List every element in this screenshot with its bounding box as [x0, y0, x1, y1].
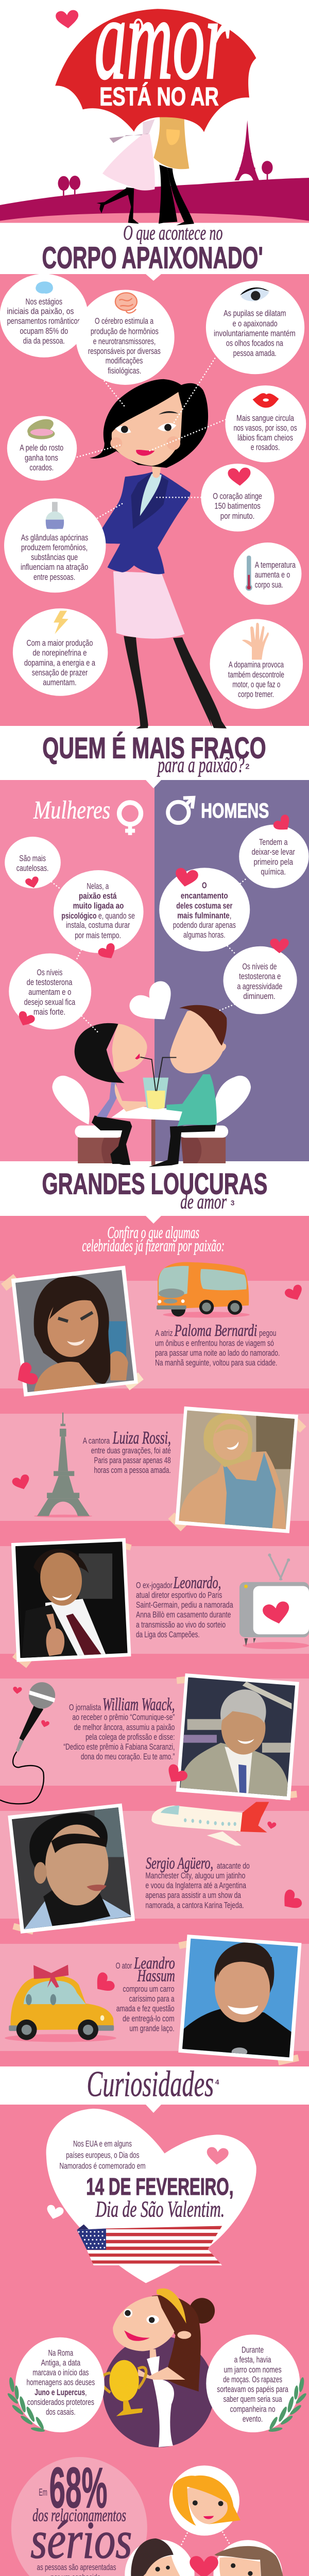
bubble: pupilas: As pupilas se dilatam [224, 309, 286, 318]
icon: heart [228, 467, 251, 486]
photo: Sergio Aguero [8, 1804, 135, 1935]
text: William Waack: ao receber o prêmio “Comunique-se” [72, 1713, 175, 1722]
bubble: psicologico: instala, costuma durar [66, 921, 130, 930]
bubble: glandulas [4, 498, 106, 592]
heading: quem e mais fraco: para a paixão? [157, 753, 244, 777]
text: Luiza Rossi [83, 1428, 171, 1475]
bubble: pupilas [206, 281, 304, 374]
bubble: niveis homem: diminuem. [243, 992, 276, 1001]
illustration: bus [157, 1262, 250, 1318]
heading: curiosidades [87, 2064, 219, 2105]
illustration: tv [239, 1553, 309, 1649]
illustration: car with bow [5, 1965, 116, 2042]
photo: Paloma Bernardi [1, 1266, 144, 1397]
text: Paloma Bernardi: Paloma Bernardi [174, 1321, 257, 1340]
bubble: durante a festa: um jarro com nomes [224, 2365, 282, 2375]
text: Luiza Rossi: A cantora [83, 1436, 110, 1446]
circle: 68 percent: sérios [30, 2511, 132, 2570]
bubble: energia: Com a maior produção [26, 639, 93, 648]
text: Luiza Rossi: entre duas gravações, foi até [91, 1446, 171, 1455]
heading: quem e mais fraco [42, 732, 266, 777]
juno illustration [101, 2289, 215, 2447]
section: loucuras 3 a 5 [0, 1538, 309, 1935]
text: Leonardo: O ex-jogador [136, 1581, 173, 1590]
date text: 14 DE FEVEREIRO, [86, 2173, 233, 2200]
text: Leandro Hassum: Hassum [137, 1967, 175, 1986]
text: William Waack: dona do meu coração. Eu te amo.” [81, 1752, 175, 1761]
text: Paloma Bernardi: pegou [259, 1329, 276, 1338]
icon: compact [25, 416, 56, 439]
bubble: roma antiga: marcava o início das [32, 2368, 89, 2378]
couple under umbrella [96, 116, 194, 225]
heading: corpo apaixonado [42, 221, 263, 275]
heading: quem e mais fraco: 2 [245, 763, 249, 771]
bubble: labios: lábios ficam cheios [237, 433, 293, 443]
bubble: niveis homem: a agressividade [237, 982, 282, 991]
bubble: energia: de norepinefrina e [32, 649, 87, 658]
dotted connectors [77, 359, 226, 518]
bubble: encantamento [159, 867, 250, 952]
bubble: temperatura: corpo sua. [255, 580, 283, 589]
text: Leandro Hassum [116, 1954, 175, 2033]
bubble: cautelosas: cautelosas. [16, 864, 49, 873]
bubble: durante a festa: de moças. Os rapazes [223, 2375, 282, 2384]
text: Leonardo: Saint-Germain, pediu a namorada [136, 1601, 233, 1610]
bubble: roma antiga: Antiga, a data [41, 2358, 81, 2367]
text: William Waack [63, 1695, 175, 1761]
bubble: labios [225, 385, 306, 462]
circle: 68 percent: Em [39, 2487, 47, 2498]
text: Paloma Bernardi [155, 1321, 280, 1368]
text: Leandro Hassum: comprou um carro [123, 1985, 175, 1994]
bubble: quimica: química. [261, 867, 286, 876]
hill with Paris skyline [0, 120, 309, 223]
bubble: niveis mulher: desejo sexual fica [24, 997, 76, 1007]
text: Paloma Bernardi: A atriz [155, 1329, 173, 1338]
bubble: pensamentos: ocupam 85% do [20, 327, 68, 336]
circle: 68 percent: 68% [49, 2456, 108, 2520]
bubble: pensamentos: dia da pessoa. [23, 336, 65, 346]
bubble: encantamento: algumas horas. [183, 930, 226, 940]
heading: curiosidades: Curiosidades [87, 2064, 214, 2105]
bubble: cerebro: e neurotransmissores, [93, 337, 156, 346]
text: Sergio Aguero: Sergio Agüero, [146, 1854, 213, 1873]
bubble: coracao: 150 batimentos [214, 502, 261, 511]
bubble: niveis mulher: mais forte. [33, 1008, 65, 1017]
bubble: cerebro: O cérebro estimula a [95, 317, 154, 326]
icon: eye [240, 287, 269, 301]
bubble: roma antiga: Na Roma [48, 2348, 74, 2358]
text: William Waack: William Waack, [102, 1695, 175, 1715]
bubble: temperatura: aumenta e o [255, 570, 290, 580]
photo: Luiza Rossi [168, 1406, 306, 1533]
text: Leonardo: Anna Billò em casamento durante [136, 1611, 231, 1620]
text: Leandro Hassum: um grande laço. [129, 2024, 175, 2033]
bubble: cerebro [76, 290, 175, 385]
icon: white heart [45, 2204, 64, 2221]
date text: Dia de São Valentim. [95, 2197, 225, 2222]
bubble: durante a festa: a festa, havia [234, 2355, 271, 2365]
bubble: roma antiga: dos casais. [46, 2408, 76, 2417]
bubble: niveis homem [224, 939, 297, 1014]
bubble: roma antiga: Juno e Lupercus, [35, 2388, 87, 2397]
text: William Waack: O jornalista [69, 1703, 101, 1713]
text: Leandro Hassum: O ator [116, 1961, 132, 1971]
bubble: quimica [239, 813, 309, 888]
bubble: durante a festa: Durante [242, 2346, 264, 2355]
section: dia de sao valentim e juno [6, 2173, 307, 2447]
bubble: niveis mulher: de testosterona [27, 978, 73, 987]
text: Luiza Rossi: Paris para passar apenas 48 [94, 1456, 171, 1465]
bubble: psicologico: psicológico e, quando se [61, 911, 135, 921]
homens title [168, 798, 269, 823]
bubble: pele [7, 416, 77, 481]
bubble: psicologico: por mais tempo. [75, 931, 121, 940]
bubble: pupilas: e o apaixonado [233, 319, 278, 328]
icon: heart [278, 1888, 304, 1914]
bubble: tremor: A dopamina provoca [229, 660, 284, 670]
bubble: tremor [210, 619, 303, 709]
text: Sergio Aguero: atacante do [217, 1861, 250, 1871]
section: casal e bolhas [9, 878, 297, 1242]
section: quem e mais fraco [5, 732, 309, 963]
bubble: coracao: O coração atinge [213, 492, 262, 501]
bubble: niveis homem: testosterona e [239, 972, 281, 981]
icon: hand [242, 623, 269, 659]
bubble: roma antiga: homenagens aos deuses [26, 2378, 95, 2387]
icon: heart [190, 2556, 218, 2576]
icon: heart [11, 1473, 32, 1492]
bubble: glandulas: entre pessoas. [33, 572, 75, 582]
big heart: dia dos namorados: países europeus, o Dia dos [66, 2151, 140, 2160]
bubble: cerebro: fisiológicas. [108, 366, 141, 376]
bubble: roma antiga: considerados protetores [27, 2398, 94, 2407]
bubble: encantamento: O [202, 881, 207, 890]
heading: curiosidades: 4 [215, 2078, 219, 2086]
big heart: dia dos namorados: Nos EUA e em alguns [73, 2139, 132, 2148]
text: William Waack: pela colega de profissão e disse: [85, 1733, 175, 1742]
text: Sergio Aguero: Manchester City, alugou um jatinho [145, 1871, 245, 1880]
bubble: psicologico: muito ligada ao [73, 902, 124, 911]
illustration: plane [151, 1802, 277, 1845]
text: Leandro Hassum: de entregá-lo com [123, 2014, 175, 2023]
illustration: microphone [0, 1682, 55, 1804]
icon: thought cloud [36, 281, 53, 294]
intro text: Confira o que algumas [107, 1224, 199, 1242]
photo: Leandro Hassum [178, 1935, 301, 2065]
bubble: cerebro: responsáveis por diversas [88, 347, 161, 356]
mulheres title [33, 795, 141, 835]
title [95, 0, 230, 111]
bubble: energia [13, 608, 108, 696]
bubble: durante a festa: companheira no [230, 2404, 276, 2414]
dotted connectors [52, 878, 246, 1033]
text: Leonardo: a transmissão ao vivo do sorteio [136, 1620, 226, 1630]
section: estatisticas [11, 2456, 293, 2576]
text: Leandro Hassum: caríssimo para a [129, 1994, 175, 2004]
photo: William Waack [163, 1673, 299, 1800]
bubble: psicologico: Nelas, a [87, 882, 109, 891]
section: corpo apaixonado [0, 274, 306, 728]
bubble: glandulas: As glândulas apócrinas [21, 533, 88, 543]
photo: Leonardo [11, 1538, 132, 1668]
bubble: pupilas: os olhos focados na [226, 339, 284, 348]
bubble: niveis homem: Os níveis de [242, 962, 277, 972]
bubble: durante a festa: evento. [243, 2415, 263, 2424]
icon: lightning [54, 611, 68, 634]
text: Leandro Hassum: Leandro [133, 1954, 175, 1973]
bubble: pensamentos [0, 274, 88, 358]
circle: 68 percent [11, 2456, 147, 2576]
bubble: pele: A pele do rosto [20, 444, 63, 453]
bubble: encantamento: deles costuma ser [176, 901, 233, 910]
bubble: niveis mulher [9, 954, 91, 1029]
bubble: energia: dopamina, a energia e a [24, 658, 96, 668]
mulheres title: Mulheres [33, 795, 110, 824]
bubble: encantamento: mais fulminante, [177, 911, 231, 920]
bubble: durante a festa: saber quem seria sua [224, 2395, 282, 2404]
bubble: tremor: motor, o que faz o [232, 680, 280, 689]
date text [86, 2173, 233, 2222]
icon: heart [284, 1283, 305, 1303]
bubble: niveis mulher: aumentam e o [28, 988, 71, 997]
icon: heart [55, 10, 79, 29]
big heart: dia dos namorados: Namorados é comemorado em [59, 2162, 146, 2171]
woman illustration [90, 379, 227, 728]
heading: corpo apaixonado: O que acontece no [123, 221, 222, 244]
text: Luiza Rossi: horas com a pessoa amada. [94, 1466, 171, 1475]
text: William Waack: de melhor âncora, assumiu a paixão [74, 1723, 175, 1732]
bubble: cerebro: produção de hormônios [91, 327, 159, 336]
bubble: coracao: por minuto. [220, 512, 254, 521]
heading: grandes loucuras: 3 [231, 1199, 235, 1207]
bubble: quimica: Tendem a [259, 838, 288, 847]
title: ESTÁ NO AR [99, 82, 219, 111]
american flag ribbon [75, 2223, 225, 2266]
bubble: labios: e rosados. [251, 443, 280, 452]
couple at table [52, 977, 251, 1167]
icon: lips [253, 393, 279, 408]
heading: grandes loucuras [42, 1167, 267, 1213]
bubble: quimica: deixar-se levar [252, 848, 295, 857]
circle: 68 percent: as pessoas são apresentadas [37, 2563, 116, 2572]
icon: thermometer [246, 555, 252, 591]
bubble: durante a festa [206, 2334, 300, 2432]
bubble: cerebro: modificações [106, 357, 143, 366]
bubble: pensamentos: Nos estágios [26, 297, 62, 307]
bubble: energia: aumentam. [43, 678, 77, 687]
text: Sergio Aguero [145, 1854, 250, 1910]
section: loucuras 1 e 2 [1, 1237, 306, 1533]
text: Sergio Aguero: namorada, a cantora Karina Tejeda. [145, 1901, 244, 1910]
bubble: roma antiga [15, 2337, 105, 2432]
bubble: cautelosas [5, 837, 61, 889]
text: Sergio Aguero: e voou da Inglaterra até a Argentina [145, 1881, 247, 1890]
bubble: coracao [201, 464, 274, 532]
bubble: encantamento: podendo durar apenas [173, 921, 236, 930]
text: Luiza Rossi: Luiza Rossi, [112, 1428, 171, 1448]
icon: heart [91, 1971, 116, 1997]
bubble: pele: ganha tons [25, 453, 58, 463]
circle: 68 percent: dos relacionamentos [32, 2506, 126, 2526]
section: hero umbrella [0, 0, 309, 275]
text: William Waack: “Dedico este prêmio à Fabiana Scaranzi, [63, 1742, 175, 1752]
illustration: eiffel tower [34, 1413, 92, 1517]
text: Leonardo [136, 1573, 233, 1639]
bubble: tremor: também descontrole [228, 670, 284, 680]
bubble: pele: corados. [29, 463, 54, 472]
bubble: temperatura: A temperatura [255, 561, 296, 570]
icon: brain [115, 293, 137, 313]
icon: perfume [46, 502, 64, 530]
umbrella [55, 9, 256, 132]
text: Leonardo: da Liga dos Campeões. [136, 1630, 200, 1639]
bubble: niveis mulher: Os níveis [37, 968, 62, 977]
bubble: pupilas: pessoa amada. [233, 349, 277, 358]
homens title: HOMENS [201, 799, 269, 822]
faces: conhecidos [125, 2465, 293, 2576]
bubble: encantamento: encantamento [181, 891, 228, 901]
bubble: psicologico: paixão está [79, 892, 117, 901]
bubble: cautelosas: São mais [19, 854, 46, 863]
bubble: glandulas: substâncias que [31, 553, 78, 562]
text: Leandro Hassum: amada e fez questão [116, 2004, 175, 2013]
bubble: tremor: corpo tremer. [238, 690, 274, 699]
heading: grandes loucuras: de amor [180, 1190, 227, 1213]
bubble: glandulas: produzem feromônios, [21, 543, 88, 552]
section: loucuras 5 e 6 [5, 1854, 304, 2283]
big heart: dia dos namorados [46, 2109, 256, 2283]
bubble: pensamentos: iniciais da paixão, os [7, 307, 74, 316]
bubble: glandulas: influenciam na atração [21, 563, 88, 572]
bubble: pensamentos: pensamentos românticos [7, 317, 81, 326]
bubble: temperatura [234, 543, 301, 605]
text: Leonardo: Leonardo, [173, 1573, 221, 1592]
text: Leonardo: atual diretor esportivo do Paris [136, 1590, 222, 1600]
bubble: energia: sensação de prazer [32, 668, 88, 677]
text: Sergio Aguero: apenas para assistir a um show da [145, 1891, 242, 1900]
laurels [6, 2377, 307, 2433]
bubble: quimica: primeiro pela [253, 857, 294, 867]
bubble: psicologico [54, 870, 144, 963]
